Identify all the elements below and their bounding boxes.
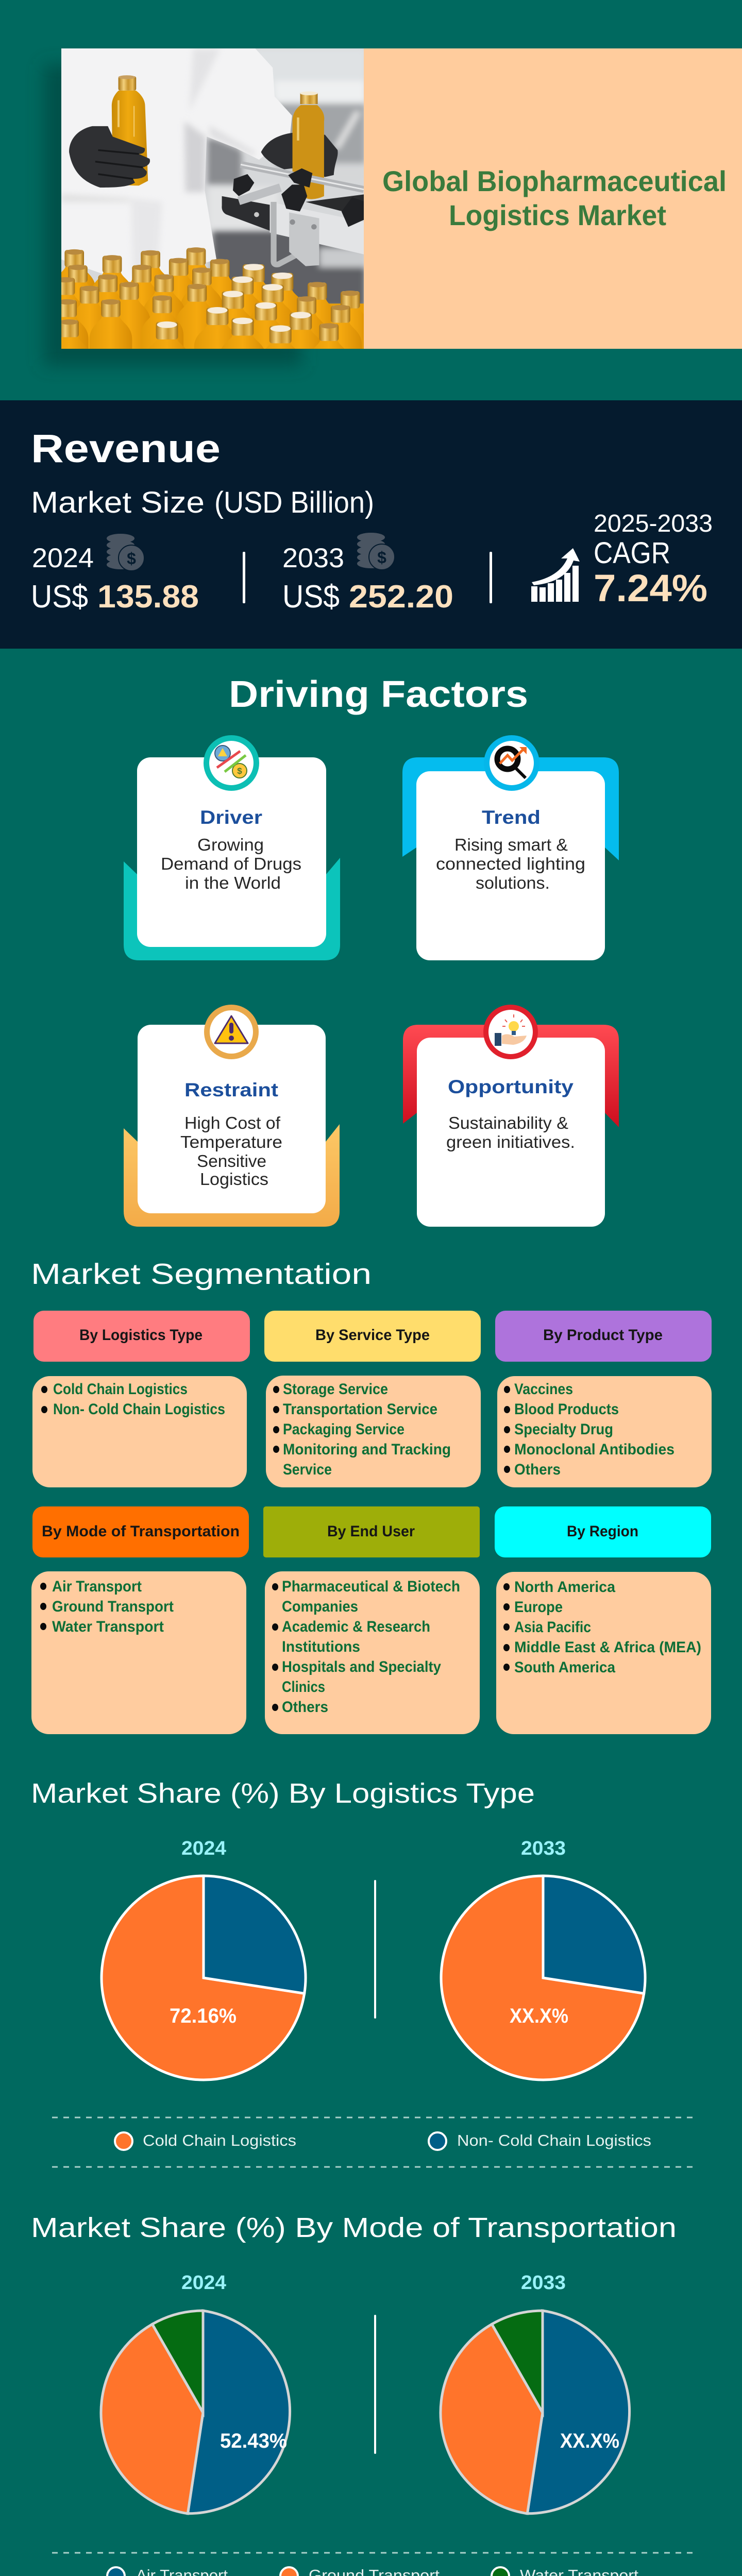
card: restraint [124, 1005, 340, 1227]
opportunity text [446, 1113, 575, 1151]
driver text: Demand of Drugs [161, 854, 301, 873]
segment: by region: South America [514, 1659, 615, 1676]
trend title: Trend [482, 807, 541, 828]
driver text [161, 835, 301, 892]
segment: by product type: Others [514, 1461, 561, 1478]
divider [490, 552, 492, 603]
segment: by end user: Others [282, 1699, 328, 1716]
icon: growth chart [531, 548, 580, 602]
icon: driver: $ [237, 766, 242, 776]
card: driver [124, 735, 340, 960]
segment: by product type: Specialty Drug [514, 1421, 613, 1438]
pie chart: transportation 2024 [101, 2272, 290, 2514]
restraint text [180, 1113, 282, 1189]
2033 value: 252.20 [349, 579, 453, 615]
driver title: Driver [200, 807, 262, 828]
revenue heading: Revenue [31, 427, 221, 471]
heading: market segmentation: Market Segmentation [31, 1258, 372, 1291]
market size label [31, 486, 374, 519]
trend text: solutions. [476, 873, 550, 892]
icon: restraint [204, 1005, 259, 1059]
segment: by region: Europe [514, 1599, 563, 1616]
segment: by region: Middle East & Africa (MEA) [514, 1639, 701, 1656]
segment: by mode of transportation: Air Transport [52, 1578, 142, 1595]
pie chart: logistics type 2033 [441, 1838, 645, 2080]
title: Global Biopharmaceutical [382, 165, 727, 197]
card: trend [402, 735, 619, 960]
segment: by service type: Transportation Service [283, 1401, 437, 1418]
2033 value: US$ [282, 579, 340, 615]
segment: by logistics type: By Logistics Type [79, 1327, 203, 1344]
pie chart: transportation 2024: 2024 [181, 2272, 226, 2294]
pie chart: logistics type 2033: XX.X% [510, 2005, 568, 2027]
2024 value: US$ [31, 579, 88, 615]
2024 value: 135.88 [97, 579, 199, 615]
legend: logistics type: Cold Chain Logistics [143, 2131, 296, 2149]
panel: revenue [0, 400, 742, 649]
segment: by region [495, 1506, 711, 1734]
pie chart: transportation 2033 [441, 2272, 630, 2514]
hero banner [40, 48, 742, 370]
driver text: Growing [197, 835, 264, 854]
divider [374, 2315, 376, 2454]
2024 value [31, 543, 199, 615]
pie chart: logistics type 2024: 2024 [181, 1838, 226, 1859]
heading: driving factors: Driving Factors [229, 674, 528, 715]
pie chart: transportation 2033: 2033 [521, 2272, 566, 2294]
icon: driver [204, 735, 259, 791]
segment: by service type: Monitoring and Tracking [283, 1441, 451, 1458]
segment: by service type: Service [283, 1461, 332, 1478]
segment: by logistics type: Cold Chain Logistics [53, 1381, 188, 1398]
segment: by product type: Vaccines [514, 1381, 573, 1398]
segment: by product type: Blood Products [514, 1401, 619, 1418]
divider [243, 552, 245, 603]
restraint title: Restraint [184, 1079, 278, 1100]
icon: opportunity [483, 1005, 538, 1059]
pie chart: logistics type 2024 [102, 1838, 306, 2080]
restraint text: Logistics [200, 1170, 268, 1189]
segment: by region: By Region [567, 1523, 638, 1540]
segment: by service type: By Service Type [315, 1327, 430, 1344]
title: Logistics Market [449, 199, 666, 231]
segment: by mode of transportation [31, 1506, 249, 1734]
heading: share by mode of transportation: Market Share (%) By Mode of Transportation [31, 2212, 677, 2243]
photo shadow [44, 64, 301, 366]
CAGR: 2025-2033 [594, 510, 713, 537]
restraint text: Temperature [180, 1132, 282, 1151]
icon: coins 2033: $ [377, 548, 386, 567]
title [382, 165, 727, 231]
segment: by end user: By End User [327, 1523, 415, 1540]
pie chart: logistics type 2024: 72.16% [170, 2005, 237, 2027]
segment: by product type: By Product Type [543, 1327, 663, 1344]
2033 value: 2033 [282, 543, 344, 573]
icon: coins 2033 [357, 533, 395, 570]
market size label: (USD Billion) [214, 486, 374, 519]
segment: by product type: Monoclonal Antibodies [514, 1441, 674, 1458]
pie chart: logistics type 2033: 2033 [521, 1838, 566, 1859]
segment: by logistics type: Non- Cold Chain Logistics [53, 1401, 225, 1418]
segment: by end user: Clinics [282, 1679, 325, 1696]
CAGR [594, 510, 713, 609]
icon: coins 2024: $ [127, 549, 136, 568]
segment: by logistics type [32, 1311, 250, 1487]
opportunity text: green initiatives. [446, 1132, 575, 1151]
2033 value [282, 543, 453, 615]
card: opportunity [403, 1005, 619, 1227]
title panel [364, 48, 742, 349]
segment: by mode of transportation: Ground Transport [52, 1598, 174, 1615]
segment: by region: North America [514, 1579, 615, 1596]
CAGR: 7.24% [594, 567, 707, 609]
pie chart: transportation 2024: 52.43% [220, 2430, 287, 2452]
segment: by service type: Storage Service [283, 1381, 388, 1398]
segment: by service type [264, 1311, 481, 1487]
segment: by end user: Companies [282, 1598, 358, 1615]
segment: by end user [263, 1506, 480, 1734]
legend: logistics type [52, 2117, 695, 2167]
photo: technician holding bottles [61, 48, 364, 349]
segment: by product type [495, 1311, 712, 1487]
segment: by end user: Hospitals and Specialty [282, 1658, 441, 1675]
segment: by end user: Pharmaceutical & Biotech [282, 1578, 460, 1595]
segment: by mode of transportation: Water Transport [52, 1618, 164, 1635]
segment: by service type: Packaging Service [283, 1421, 404, 1438]
market size label: Market Size [31, 486, 205, 519]
pie chart: transportation 2033: XX.X% [560, 2430, 619, 2452]
CAGR: CAGR [594, 536, 670, 570]
2024 value: 2024 [32, 543, 94, 573]
opportunity title: Opportunity [448, 1076, 574, 1097]
segment: by mode of transportation: By Mode of Transportation [42, 1523, 240, 1540]
restraint text: Sensitive [197, 1151, 266, 1171]
trend text [436, 835, 585, 892]
driver text: in the World [185, 873, 281, 892]
legend: transportation [52, 2553, 695, 2576]
legend: logistics type: Non- Cold Chain Logistics [457, 2131, 651, 2149]
trend text: Rising smart & [454, 835, 568, 854]
segment: by end user: Institutions [282, 1638, 360, 1655]
icon: trend [484, 735, 539, 791]
segment: by end user: Academic & Research [282, 1618, 430, 1635]
segment: by region: Asia Pacific [514, 1619, 591, 1636]
icon: coins 2024 [107, 534, 144, 571]
divider [374, 1880, 376, 2019]
heading: share by logistics type: Market Share (%) By Logistics Type [31, 1778, 535, 1809]
opportunity text: Sustainability & [448, 1113, 568, 1132]
restraint text: High Cost of [184, 1113, 281, 1132]
trend text: connected lighting [436, 854, 585, 873]
